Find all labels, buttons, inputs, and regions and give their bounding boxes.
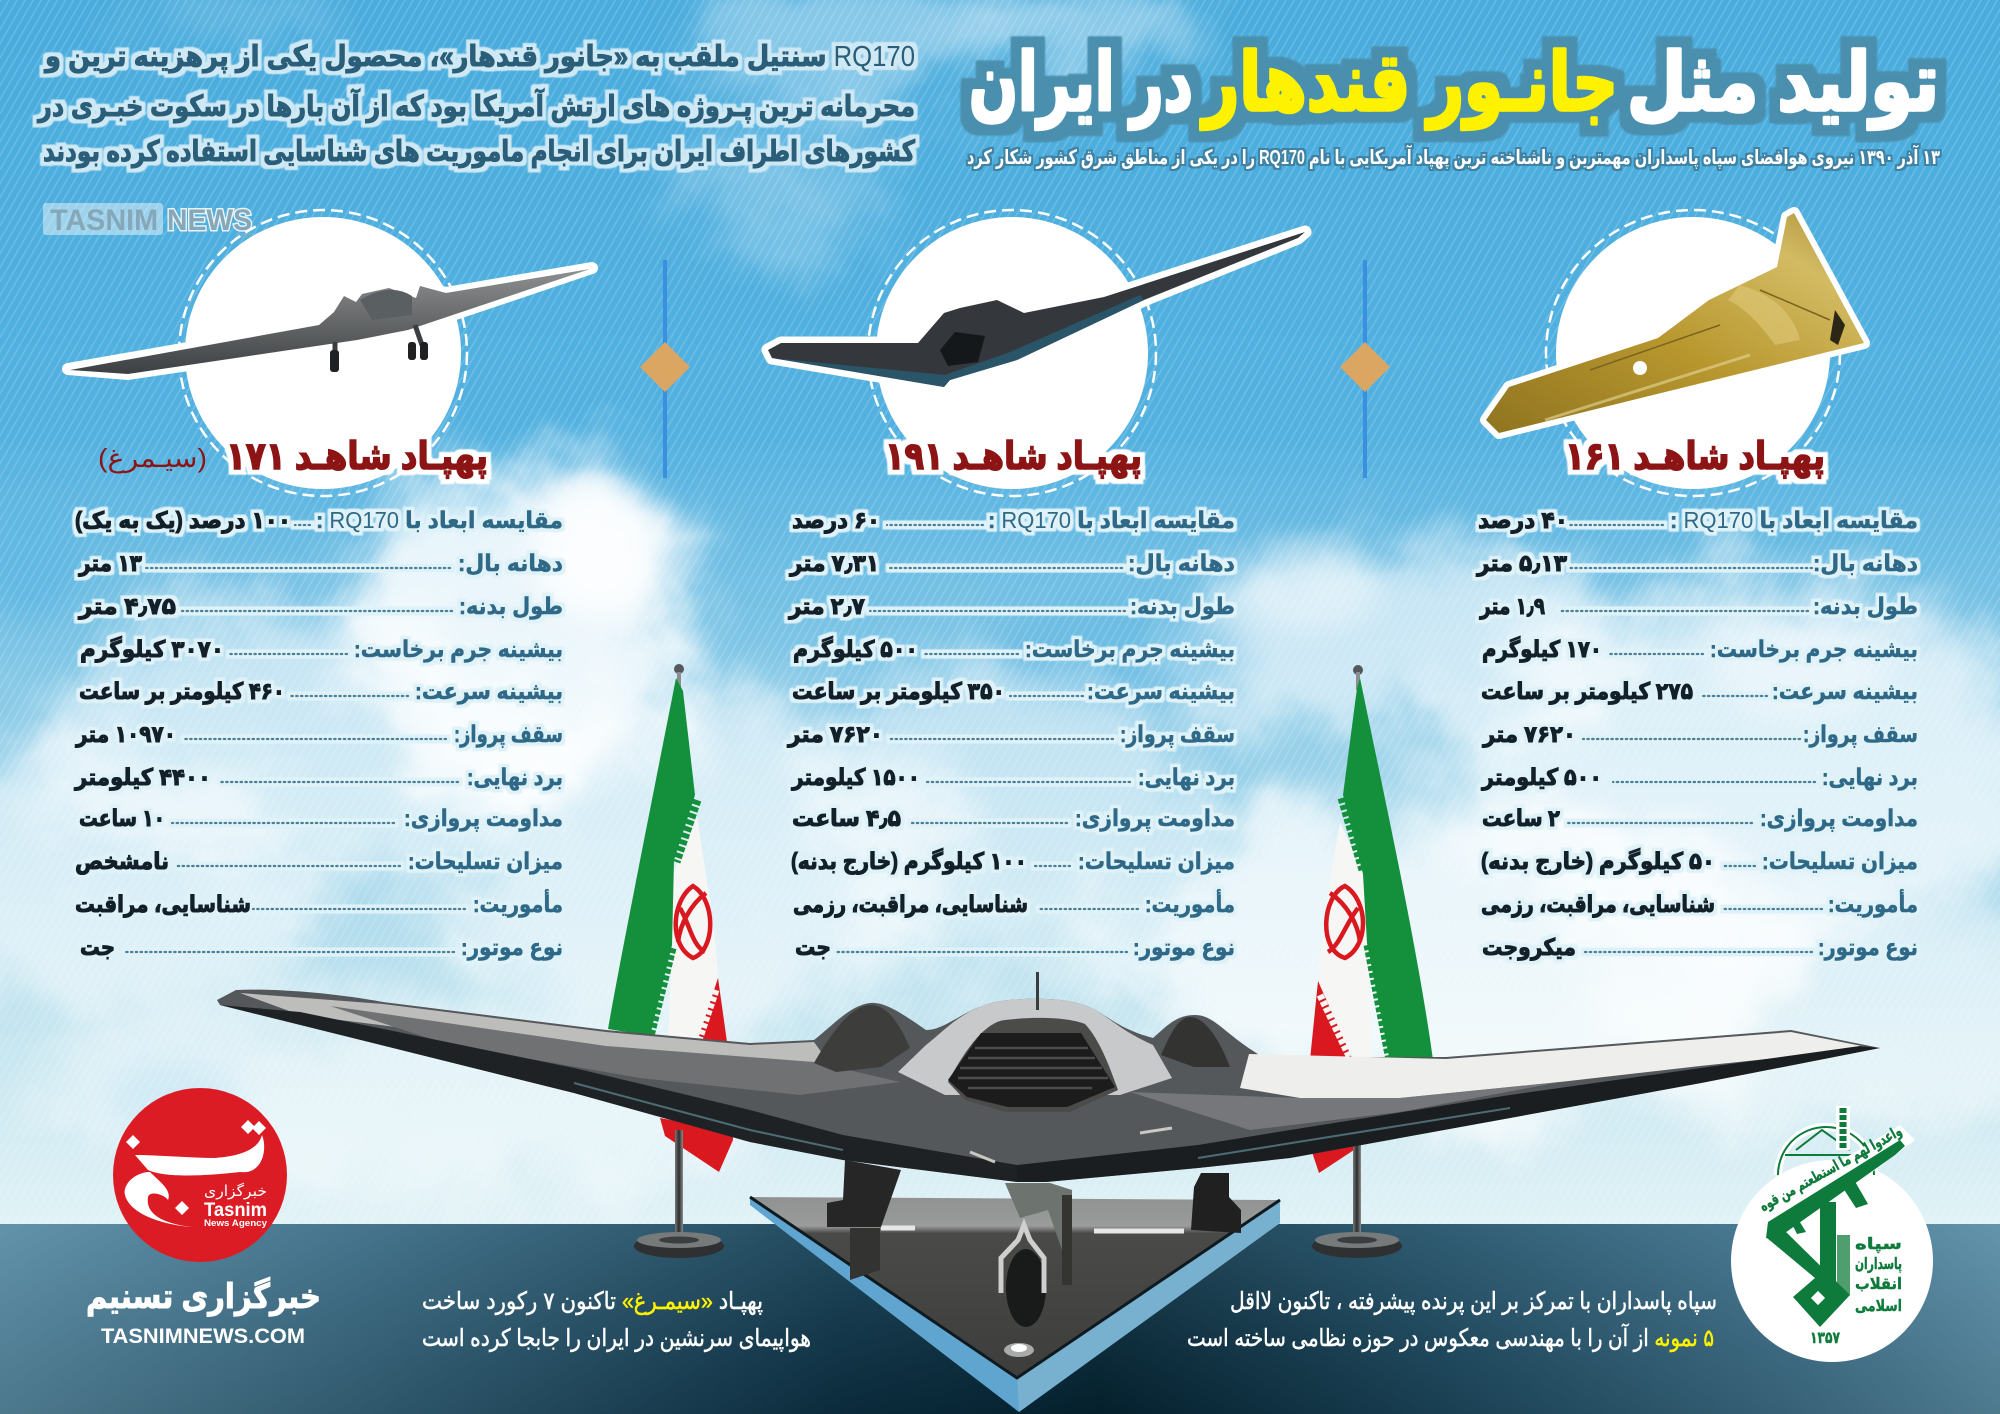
flag base left (634, 1130, 724, 1258)
spec table: drone 171: سقف پرواز: (454, 721, 563, 748)
footer text right: ۵ نمونه از آن را با مهندسی معکوس در حوزه نظامی ساخته است (1187, 1323, 1714, 1352)
spec table: drone 191: مقایسه ابعاد با RQ170 : (988, 507, 1235, 533)
logo: Tasnim wordmark: TASNIMNEWS.COM (101, 1325, 305, 1348)
spec table: drone 161: مأموریت: (1828, 888, 1918, 918)
spec table: drone 191 (787, 507, 1235, 961)
spec table: drone 161: ۴۰ درصد (1478, 507, 1568, 534)
spec table: drone 171: طول بدنه: (459, 593, 563, 620)
spec table: drone 171: مداومت پروازی: (404, 805, 563, 832)
spec table: drone 161: برد نهایی: (1822, 764, 1918, 791)
display platform (750, 1197, 1280, 1412)
spec table: drone 191: ۱۵۰۰ کیلومتر (791, 764, 920, 791)
drone 171 illustration (68, 268, 592, 374)
logo: IRGC emblem (1731, 1106, 1933, 1362)
spec table: drone 171: نوع موتور: (461, 934, 563, 961)
spec table: drone 191: میزان تسلیحات: (1078, 848, 1235, 875)
logo: Tasnim wordmark (86, 1277, 321, 1348)
spec table: drone 171: نامشخص (75, 848, 169, 875)
spec table: drone 161: ۲ ساعت (1482, 805, 1560, 831)
intro paragraph: محرمانه ترین پـروژه های ارتش آمریکا بود که از آن بارها در سکوت خبـری در (36, 88, 915, 124)
spec table: drone 191: سقف پرواز: (1120, 721, 1235, 748)
logo: IRGC emblem: انقلاب (1855, 1276, 1902, 1293)
spec table: drone 161: ۵۰۰ کیلومتر (1481, 764, 1602, 791)
spec table: drone 171: ۴۶۰ کیلومتر بر ساعت (79, 678, 285, 705)
spec table: drone 161: بیشینه سرعت: (1772, 678, 1918, 705)
spec table: drone 191: نوع موتور: (1133, 934, 1235, 961)
spec table: drone 191: ۲٫۷ متر (788, 593, 865, 620)
logo: IRGC emblem: پاسداران (1855, 1256, 1902, 1274)
logo: Tasnim wordmark: خبرگزاری تسنیم (86, 1277, 321, 1317)
spec table: drone 171: شناسایی، مراقبت (75, 891, 251, 918)
spec table: drone 171: مأموریت: (473, 888, 563, 918)
logo: Tasnim red badge (113, 1088, 287, 1262)
spec table: drone 171: بیشینه سرعت: (415, 678, 563, 705)
spec table: drone 191: ۵۰۰ کیلوگرم (793, 636, 918, 663)
circle: drone 171 backdrop (179, 210, 467, 496)
spec table: drone 171: برد نهایی: (467, 764, 563, 791)
spec table: drone 161: ۲۷۵ کیلومتر بر ساعت (1481, 678, 1693, 705)
divider right (1340, 260, 1390, 478)
label: Simorgh: (سیـمرغ) (98, 443, 207, 474)
spec table: drone 171: ۳۰۷۰ کیلوگرم (80, 636, 224, 663)
spec table: drone 171: مقایسه ابعاد با RQ170 : (316, 507, 563, 533)
spec table: drone 171: ۱۳ متر (78, 550, 142, 577)
spec table: drone 171: ۴٫۷۵ متر (78, 593, 176, 620)
footer text left (422, 1288, 811, 1352)
flag left (608, 664, 733, 1172)
spec table: drone 161: میکروجت (1482, 934, 1576, 961)
spec table: drone 191: جت (795, 934, 831, 960)
spec table: drone 191: ۷٫۳۱ متر (789, 550, 879, 577)
spec table: drone 161: ۵٫۱۳ متر (1476, 550, 1567, 577)
spec table: drone 191: ۳۵۰ کیلومتر بر ساعت (792, 678, 1005, 705)
watermark: Tasnim News: TASNIM (50, 204, 158, 237)
drone 161 illustration (1486, 213, 1864, 433)
divider left (640, 260, 690, 478)
watermark: Tasnim News (43, 203, 254, 240)
spec table: drone 191: طول بدنه: (1130, 593, 1235, 620)
spec table: drone 171: جت (80, 934, 115, 960)
spec table: drone 171 (74, 507, 563, 961)
heading: drone 191: پهپـاد شاهـد ۱۹۱ (885, 436, 1142, 478)
spec table: drone 171: ۴۴۰۰ کیلومتر (74, 764, 211, 791)
spec table: drone 171: دهانه بال: (458, 550, 563, 576)
drone 191 illustration (768, 232, 1305, 387)
flag right (1310, 665, 1433, 1173)
circle: drone 191 backdrop (868, 210, 1156, 496)
footer text right: سپاه پاسداران با تمرکز بر این پرنده پیشرفته ، تاکنون لااقل (1230, 1288, 1717, 1315)
logo: IRGC emblem: اسلامی (1855, 1298, 1902, 1315)
spec table: drone 191: ۴٫۵ ساعت (792, 805, 901, 831)
spec table: drone 161: مقایسه ابعاد با RQ170 : (1670, 507, 1918, 533)
flag base right (1312, 1130, 1402, 1258)
watermark: Tasnim News: NEWS (167, 204, 252, 237)
spec table: drone 161 (1476, 507, 1918, 961)
intro paragraph: کشورهای اطراف ایران برای انجام ماموریت های شناسایی استفاده کرده بودند (43, 136, 915, 168)
spec table: drone 171: بیشینه جرم برخاست: (354, 636, 563, 663)
title: جانـور قندهار (1200, 38, 1618, 130)
circle: drone 161 backdrop (1546, 210, 1840, 496)
spec table: drone 161: ۷۶۲۰ متر (1482, 721, 1576, 748)
intro paragraph (36, 41, 915, 168)
spec table: drone 191: ۱۰۰ کیلوگرم (خارج بدنه) (791, 848, 1027, 875)
spec table: drone 191: مداومت پروازی: (1075, 805, 1235, 832)
footer text left: پهپـاد «سیمـرغ» تاکنون ۷ رکورد ساخت (422, 1288, 763, 1315)
footer text right (1187, 1288, 1717, 1352)
spec table: drone 191: شناسایی، مراقبت، رزمی (793, 891, 1028, 918)
watermark: Tasnim News: .com (234, 230, 254, 240)
spec table: drone 161: نوع موتور: (1818, 934, 1918, 961)
logo: IRGC emblem: ۱۳۵۷ (1810, 1330, 1840, 1347)
spec table: drone 171: ۱۰ ساعت (79, 805, 165, 831)
main drone landing gear (827, 1160, 1241, 1357)
spec table: drone 161: میزان تسلیحات: (1762, 848, 1918, 875)
spec table: drone 161: ۱۷۰ کیلوگرم (1482, 636, 1602, 663)
background: dark floor band (0, 1224, 2000, 1414)
intro paragraph: RQ170 سنتیل ملقب به «جانور قندهار»، محصول یکی از پرهزینه ترین و (43, 41, 915, 74)
spec table: drone 171: ۱۰۹۷۰ متر (75, 721, 176, 748)
spec table: drone 161: سقف پرواز: (1803, 721, 1918, 748)
spec table: drone 171: ۱۰۰ درصد (یک به یک) (75, 507, 291, 534)
spec table: drone 191: ۷۶۲۰ متر (787, 721, 883, 748)
spec table: drone 161: شناسایی، مراقبت، رزمی (1481, 891, 1715, 918)
footer text left: هواپیمای سرنشین در ایران را جابجا کرده است (422, 1325, 811, 1352)
spec table: drone 161: مداومت پروازی: (1760, 805, 1918, 832)
spec table: drone 161: دهانه بال: (1813, 550, 1918, 576)
heading: drone 161: پهپـاد شاهـد ۱۶۱ (1565, 436, 1825, 478)
title (969, 38, 1939, 130)
spec table: drone 191: بیشینه سرعت: (1087, 678, 1235, 705)
logo: Tasnim red badge: News Agency (204, 1218, 268, 1229)
main drone (217, 972, 1880, 1182)
logo: Tasnim red badge: Tasnim (204, 1200, 267, 1221)
spec table: drone 191: ۶۰ درصد (792, 507, 880, 534)
spec table: drone 191: برد نهایی: (1138, 764, 1235, 791)
spec table: drone 191: مأموریت: (1145, 888, 1235, 918)
spec table: drone 161: ۱٫۹ متر (1479, 593, 1545, 620)
logo: IRGC emblem: واعدوا لهم ما استطعتم من قوه (1757, 1123, 1905, 1215)
spec table: drone 191: بیشینه جرم برخاست: (1025, 636, 1235, 663)
spec table: drone 161: ۵۰ کیلوگرم (خارج بدنه) (1481, 848, 1715, 875)
spec table: drone 161: طول بدنه: (1813, 593, 1918, 620)
spec table: drone 161: بیشینه جرم برخاست: (1710, 636, 1918, 663)
heading: drone 171: پهپـاد شاهـد ۱۷۱ (226, 436, 488, 478)
title: در ایران (969, 38, 1193, 130)
title: تولید مثل (1627, 38, 1939, 130)
spec table: drone 191: دهانه بال: (1128, 550, 1235, 576)
spec table: drone 171: میزان تسلیحات: (408, 848, 563, 875)
logo: IRGC emblem: سپاه (1855, 1236, 1902, 1254)
logo: Tasnim red badge: خبرگزاری (204, 1182, 267, 1200)
